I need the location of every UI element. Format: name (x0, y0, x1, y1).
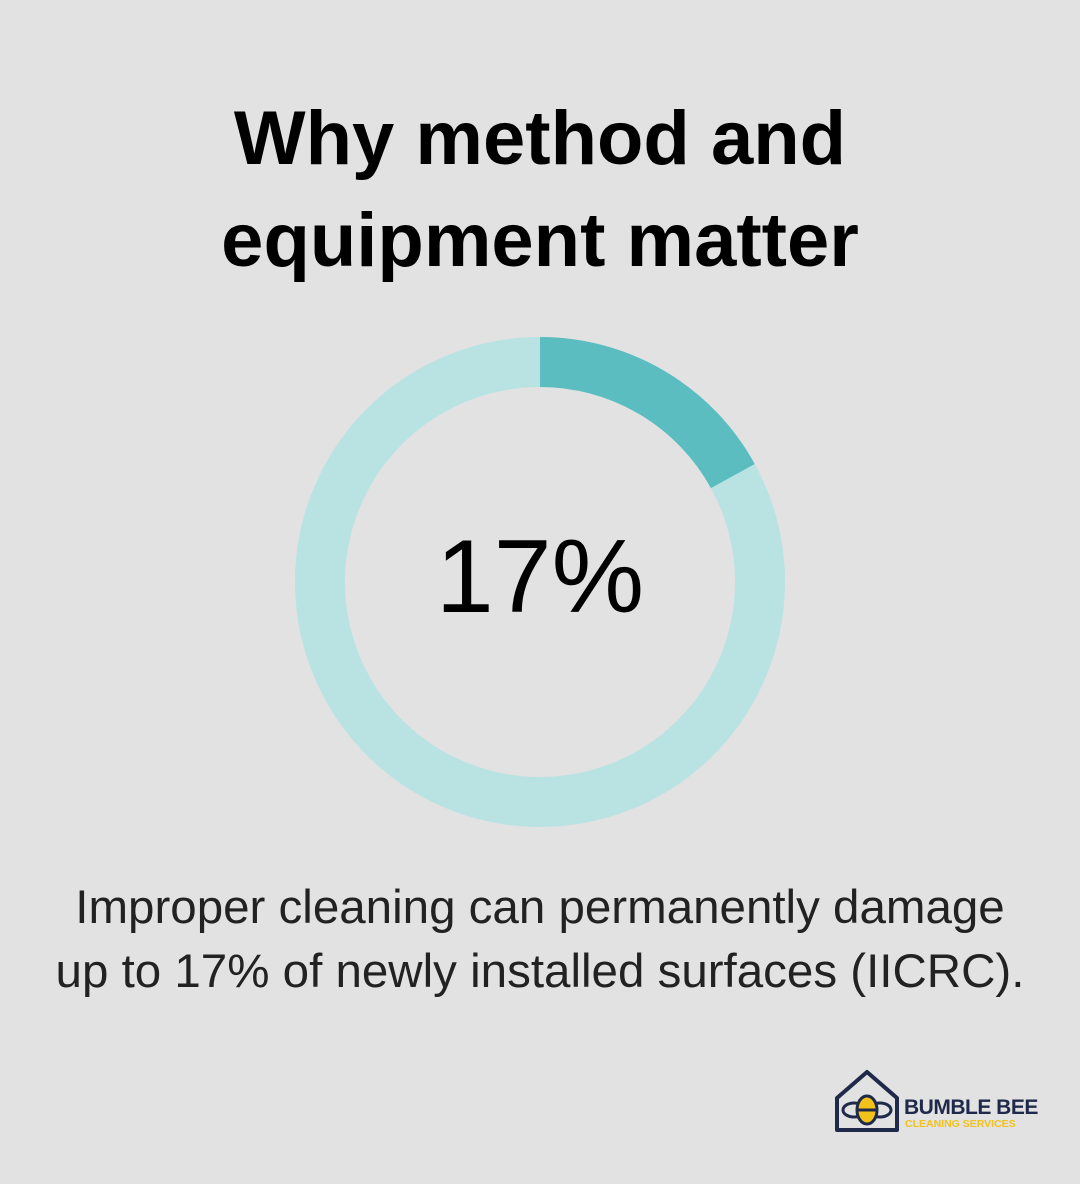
icon: bee house (835, 1070, 899, 1132)
title: Why method and (234, 96, 846, 181)
brand text: BUMBLE BEE (904, 1096, 1038, 1119)
title (221, 96, 859, 283)
description (56, 881, 1024, 998)
description: Improper cleaning can permanently damage (75, 881, 1005, 934)
logo (835, 1070, 1038, 1132)
logo: CLEANING SERVICES (905, 1118, 1016, 1130)
description: up to 17% of newly installed surfaces (IICRC). (56, 945, 1024, 998)
title: equipment matter (221, 198, 859, 283)
percentage: 17% (436, 519, 644, 635)
